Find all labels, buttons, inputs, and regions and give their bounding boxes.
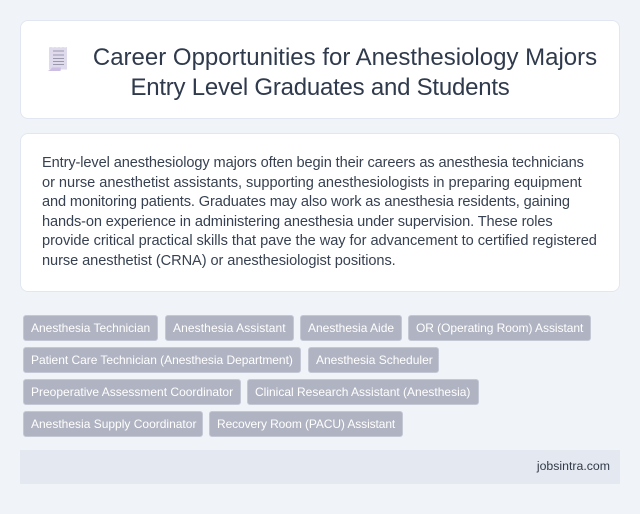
tag [247, 379, 479, 405]
tag: Anesthesia Aide [308, 321, 394, 335]
tag [308, 347, 439, 373]
description text: Entry-level anesthesiology majors often begin their careers as anesthesia technicians [42, 155, 584, 171]
tag [165, 315, 294, 341]
tag [300, 315, 402, 341]
tag: Anesthesia Assistant [173, 321, 286, 335]
tag [408, 315, 591, 341]
tag [23, 379, 241, 405]
title: Career Opportunities for Anesthesiology Majors [93, 44, 597, 71]
tag: Anesthesia Technician [31, 321, 150, 335]
tag: Anesthesia Supply Coordinator [31, 417, 196, 431]
title: Entry Level Graduates and Students [130, 74, 510, 101]
tag: OR (Operating Room) Assistant [416, 321, 583, 335]
tag [209, 411, 403, 437]
description panel [20, 133, 620, 292]
footer source: jobsintra.com [537, 459, 610, 473]
footer bar [20, 450, 620, 484]
icon: document [48, 47, 67, 71]
tag: Clinical Research Assistant (Anesthesia) [255, 385, 470, 399]
tag [23, 347, 301, 373]
description text: hands-on experience in administering anesthesia under supervision. These roles [42, 214, 553, 230]
description text: nurse anesthetist (CRNA) or anesthesiologist positions. [42, 252, 396, 268]
tag [23, 315, 158, 341]
description text: and monitoring patients. Graduates may also work as anesthesia residents, gaining [42, 194, 570, 210]
title [93, 44, 597, 101]
header panel [20, 20, 620, 119]
job tags [23, 315, 591, 437]
tag [23, 411, 203, 437]
tag: Recovery Room (PACU) Assistant [217, 417, 395, 431]
tag: Anesthesia Scheduler [316, 353, 433, 367]
description text [42, 155, 597, 268]
tag: Patient Care Technician (Anesthesia Department) [31, 353, 293, 367]
description text: or nurse anesthetist assistants, supporting anesthesiologists in preparing equipment [42, 174, 582, 190]
description text: provide critical practical skills that pave the way for advancement to certified registered [42, 233, 597, 249]
tag: Preoperative Assessment Coordinator [31, 385, 233, 399]
